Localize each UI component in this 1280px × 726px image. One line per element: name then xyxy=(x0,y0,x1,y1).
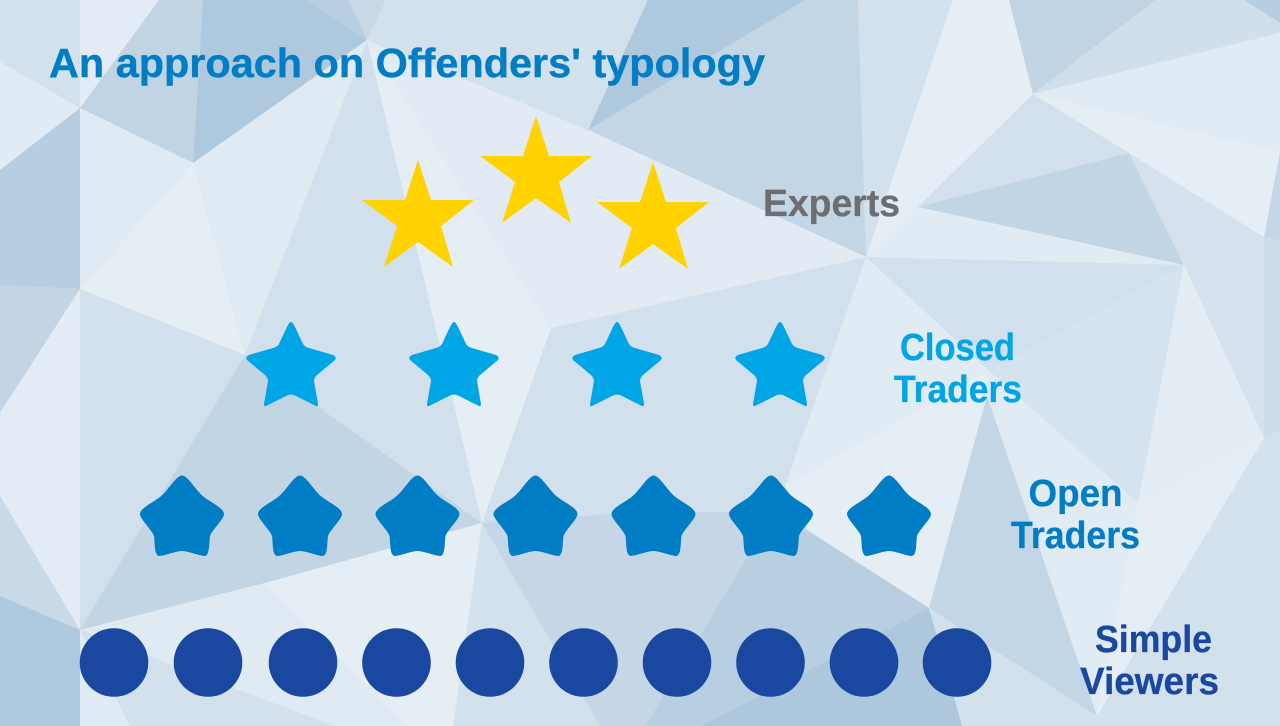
icon: rounded star 5 xyxy=(612,476,696,556)
icon: gold star 1 xyxy=(362,160,474,267)
label: simple viewers: Viewers xyxy=(1080,661,1219,703)
tier: closed traders light blue stars xyxy=(246,322,825,406)
label: simple viewers xyxy=(1080,619,1219,703)
label: closed traders: Closed xyxy=(900,327,1015,369)
icon: light blue star 2 xyxy=(409,322,499,406)
icon: rounded star 1 xyxy=(140,476,224,556)
icon: rounded star 2 xyxy=(258,476,342,556)
label: simple viewers: Simple xyxy=(1095,619,1212,661)
icon: rounded star 6 xyxy=(729,476,813,556)
icon: light blue star 3 xyxy=(572,322,662,406)
icon: rounded star 7 xyxy=(847,476,931,556)
icon: light blue star 4 xyxy=(735,322,825,406)
tier: open traders rounded stars xyxy=(140,476,931,556)
icon: rounded star 4 xyxy=(494,476,578,556)
label: open traders: Traders xyxy=(1011,515,1140,557)
label: closed traders: Traders xyxy=(894,369,1022,411)
icon: light blue star 1 xyxy=(246,322,336,406)
label: open traders: Open xyxy=(1028,473,1122,515)
title: An approach on Offenders' typology xyxy=(49,40,765,86)
tier: simple viewers navy circles xyxy=(80,628,991,697)
icon: gold star 3 xyxy=(597,162,709,269)
icon: gold star 2 xyxy=(480,116,592,223)
icon: rounded star 3 xyxy=(376,476,460,556)
label: open traders xyxy=(1011,473,1140,557)
label: closed traders xyxy=(894,327,1022,411)
label: experts: Experts xyxy=(763,183,900,225)
tier: experts gold stars xyxy=(362,116,709,269)
